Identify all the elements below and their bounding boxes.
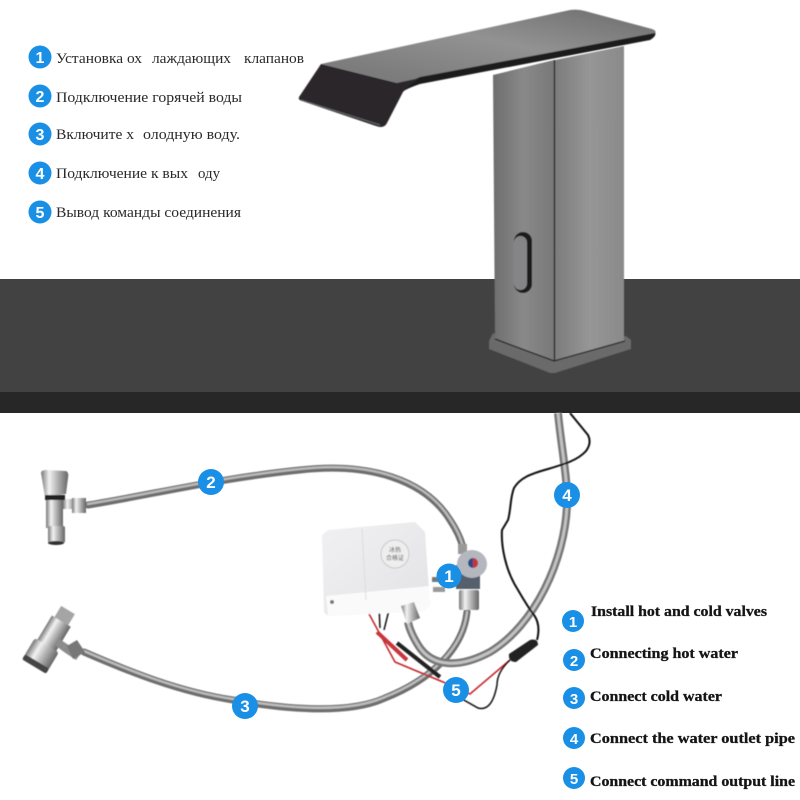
red and black leads [368,606,510,709]
control box [322,522,430,616]
marker 4: 4 [562,486,572,505]
step 4 RU: Подключение к вых [56,166,189,182]
step 2 RU: 2 [36,89,45,106]
diagram markers [198,469,580,719]
spout [299,10,656,127]
step 3 RU [28,122,240,146]
step 5 RU: 5 [36,205,45,222]
step 5 RU: Вывод команды соединения [56,205,241,221]
countertop [0,279,800,413]
step 1 RU: Установка ох [56,51,143,67]
step 2 RU: Подключение горячей воды [56,90,242,106]
outlet nut [401,602,420,624]
faucet body [493,46,625,361]
faucet base [489,333,631,373]
hot water hose [88,467,463,548]
step 4 EN: Connect the water outlet pipe [590,731,796,747]
marker 1 [436,564,462,588]
step 4 RU: оду [198,166,220,182]
step 2 RU [28,84,242,108]
cold water valve [22,603,85,674]
hot water valve [41,470,86,545]
step 3 RU: Включите х [56,127,135,143]
marker 2: 2 [206,473,216,492]
step 4 RU: 4 [36,166,45,183]
step 5 EN: 5 [570,771,578,788]
step 4 EN: 4 [570,731,579,748]
step 4 EN [563,727,796,749]
step 1 RU: клапанов [244,51,304,67]
marker 4 [554,482,580,508]
step 1 EN: 1 [569,614,577,631]
step 2 EN: 2 [570,653,578,670]
marker 5: 5 [451,681,461,700]
outlet hose [408,413,567,663]
step 1 EN [562,604,767,632]
step 5 EN [563,767,796,790]
step 3 RU: 3 [36,127,45,144]
faucet [299,10,656,373]
step 4 RU [28,162,220,184]
step 5 EN: Connect command output line [590,774,796,790]
step 3 EN: 3 [570,691,578,708]
Russian step list [28,46,304,224]
step 5 RU [28,200,241,224]
plumbing diagram [22,413,590,709]
marker 3 [232,693,258,719]
sensor window [514,232,532,293]
mixing valve [432,544,487,610]
marker 2 [198,469,224,495]
step 1 RU: лаждающих [152,51,231,67]
step 3 RU: олодную воду. [143,127,240,143]
step 2 EN: Connecting hot water [590,646,739,662]
step 1 EN: Install hot and cold valves [591,604,767,620]
marker 1: 1 [444,567,454,586]
cold water hose [84,612,467,709]
marker 3: 3 [240,697,250,716]
step 2 EN [563,646,739,671]
wire connector [509,640,538,662]
control box: 冰热 [389,545,401,554]
step 3 EN [563,687,723,709]
control box: 合格证 [386,553,404,562]
step 3 EN: Connect cold water [590,689,723,705]
step 1 RU: 1 [36,50,45,67]
step 1 RU [28,46,304,68]
marker 5 [443,677,469,703]
English step list [562,604,796,790]
black signal wire [502,413,590,640]
